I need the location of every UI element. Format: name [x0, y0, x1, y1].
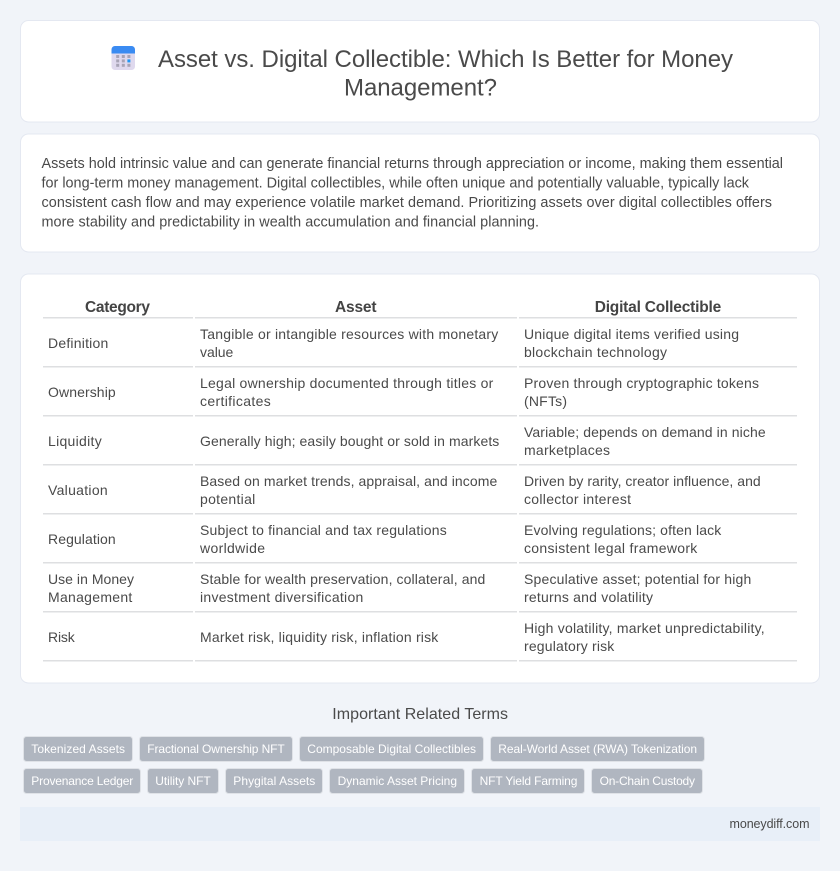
row: Definition: value [200, 344, 234, 360]
header panel [20, 20, 820, 122]
row: Ownership: Legal ownership documented through titles or [200, 375, 494, 391]
tag: Composable Digital Collectibles: Composable Digital Collectibles [307, 742, 476, 756]
row: Definition: Unique digital items verified using [524, 326, 739, 342]
title: Management? [344, 74, 497, 102]
row: Risk [48, 620, 765, 654]
row: Risk: Risk [48, 629, 76, 645]
summary text: for long-term money management. Digital collectibles, while often unique and potentially valuable, typically lack [42, 176, 750, 192]
tag: Dynamic Asset Pricing: Dynamic Asset Pricing [338, 774, 457, 788]
row: Valuation: potential [200, 491, 255, 507]
row: Liquidity: Generally high; easily bought or sold in markets [200, 433, 499, 449]
footer bar: moneydiff.com [730, 817, 810, 831]
panel: comparison table [20, 274, 820, 683]
table header row: Category [85, 299, 150, 316]
tag: Real-World Asset (RWA) Tokenization: Real-World Asset (RWA) Tokenization [498, 742, 697, 756]
tag: Provenance Ledger [24, 768, 140, 794]
row: Use in Money Management: Speculative asset; potential for high [524, 571, 751, 587]
row: Risk: regulatory risk [524, 638, 615, 654]
row: Valuation: Driven by rarity, creator influence, and [524, 473, 761, 489]
row: Use in Money Management: Stable for wealth preservation, collateral, and [200, 571, 485, 587]
heading: important related terms: Important Related Terms [332, 706, 508, 723]
tag: NFT Yield Farming [472, 768, 584, 794]
tag: Composable Digital Collectibles [300, 736, 484, 762]
row: Regulation: Evolving regulations; often lack [524, 522, 722, 538]
row: Regulation: worldwide [199, 540, 265, 556]
row: Risk: Market risk, liquidity risk, inflation risk [200, 629, 439, 645]
row: Liquidity: Liquidity [48, 433, 102, 449]
row: Use in Money Management: investment diversification [200, 589, 363, 605]
summary text [42, 156, 783, 230]
row: Regulation: Subject to financial and tax regulations [200, 522, 447, 538]
tag: NFT Yield Farming: NFT Yield Farming [480, 774, 577, 788]
footer bar [20, 807, 820, 841]
tag: Utility NFT: Utility NFT [155, 774, 211, 788]
tag: Fractional Ownership NFT [140, 736, 292, 762]
tag: Real-World Asset (RWA) Tokenization [490, 736, 704, 762]
table header row: Asset [335, 299, 376, 316]
title: Asset vs. Digital Collectible: Which Is Better for Money [158, 46, 733, 73]
row: Ownership: Proven through cryptographic tokens [524, 375, 759, 391]
summary text: consistent cash flow and may experience volatile market demand. Prioritizing assets over digital collectibles offers [42, 195, 772, 211]
row: Ownership [48, 375, 759, 409]
row: Risk: High volatility, market unpredictability, [524, 620, 765, 636]
row: Liquidity: Variable; depends on demand in niche [524, 424, 766, 440]
row: Regulation: Regulation [48, 531, 116, 547]
tag: Tokenized Assets: Tokenized Assets [31, 742, 125, 756]
row: Valuation: Based on market trends, appraisal, and income [200, 473, 498, 489]
summary text: Assets hold intrinsic value and can generate financial returns through appreciation or income, making them essential [42, 156, 783, 172]
table header row: Digital Collectible [595, 299, 722, 316]
row: Definition: blockchain technology [524, 344, 667, 360]
tag: Provenance Ledger: Provenance Ledger [31, 774, 133, 788]
row: Definition [48, 326, 739, 360]
row: Use in Money Management [48, 571, 751, 605]
row: Regulation [48, 522, 722, 556]
tag: On-Chain Custody [592, 768, 702, 794]
tag: Dynamic Asset Pricing [330, 768, 464, 794]
icon: calendar [112, 46, 135, 70]
title [158, 46, 733, 102]
row: Ownership: (NFTs) [524, 393, 567, 409]
row: Definition: Tangible or intangible resources with monetary [200, 326, 498, 342]
row: Liquidity: marketplaces [524, 442, 610, 458]
summary text: more stability and predictability in wealth accumulation and financial planning. [42, 214, 539, 230]
tag: Phygital Assets [226, 768, 322, 794]
row: Valuation: collector interest [524, 491, 631, 507]
row: Ownership: certificates [200, 393, 271, 409]
row: Definition: Definition [48, 335, 108, 351]
row: Regulation: consistent legal framework [524, 540, 698, 556]
row: Liquidity [48, 424, 766, 458]
tag: On-Chain Custody: On-Chain Custody [600, 774, 695, 788]
row: Ownership: Ownership [48, 384, 116, 400]
row: Use in Money Management: returns and volatility [524, 589, 653, 605]
row: Use in Money Management: Management [48, 589, 132, 605]
tag: Tokenized Assets [24, 736, 132, 762]
tag: Utility NFT [148, 768, 218, 794]
related term tags [24, 736, 704, 794]
row: Valuation [48, 473, 761, 507]
panel: summary paragraph [20, 134, 820, 252]
row: Valuation: Valuation [48, 482, 108, 498]
row: Use in Money Management: Use in Money [48, 571, 134, 587]
tag: Phygital Assets: Phygital Assets [233, 774, 315, 788]
table header row [85, 299, 722, 316]
tag: Fractional Ownership NFT: Fractional Ownership NFT [147, 742, 285, 756]
